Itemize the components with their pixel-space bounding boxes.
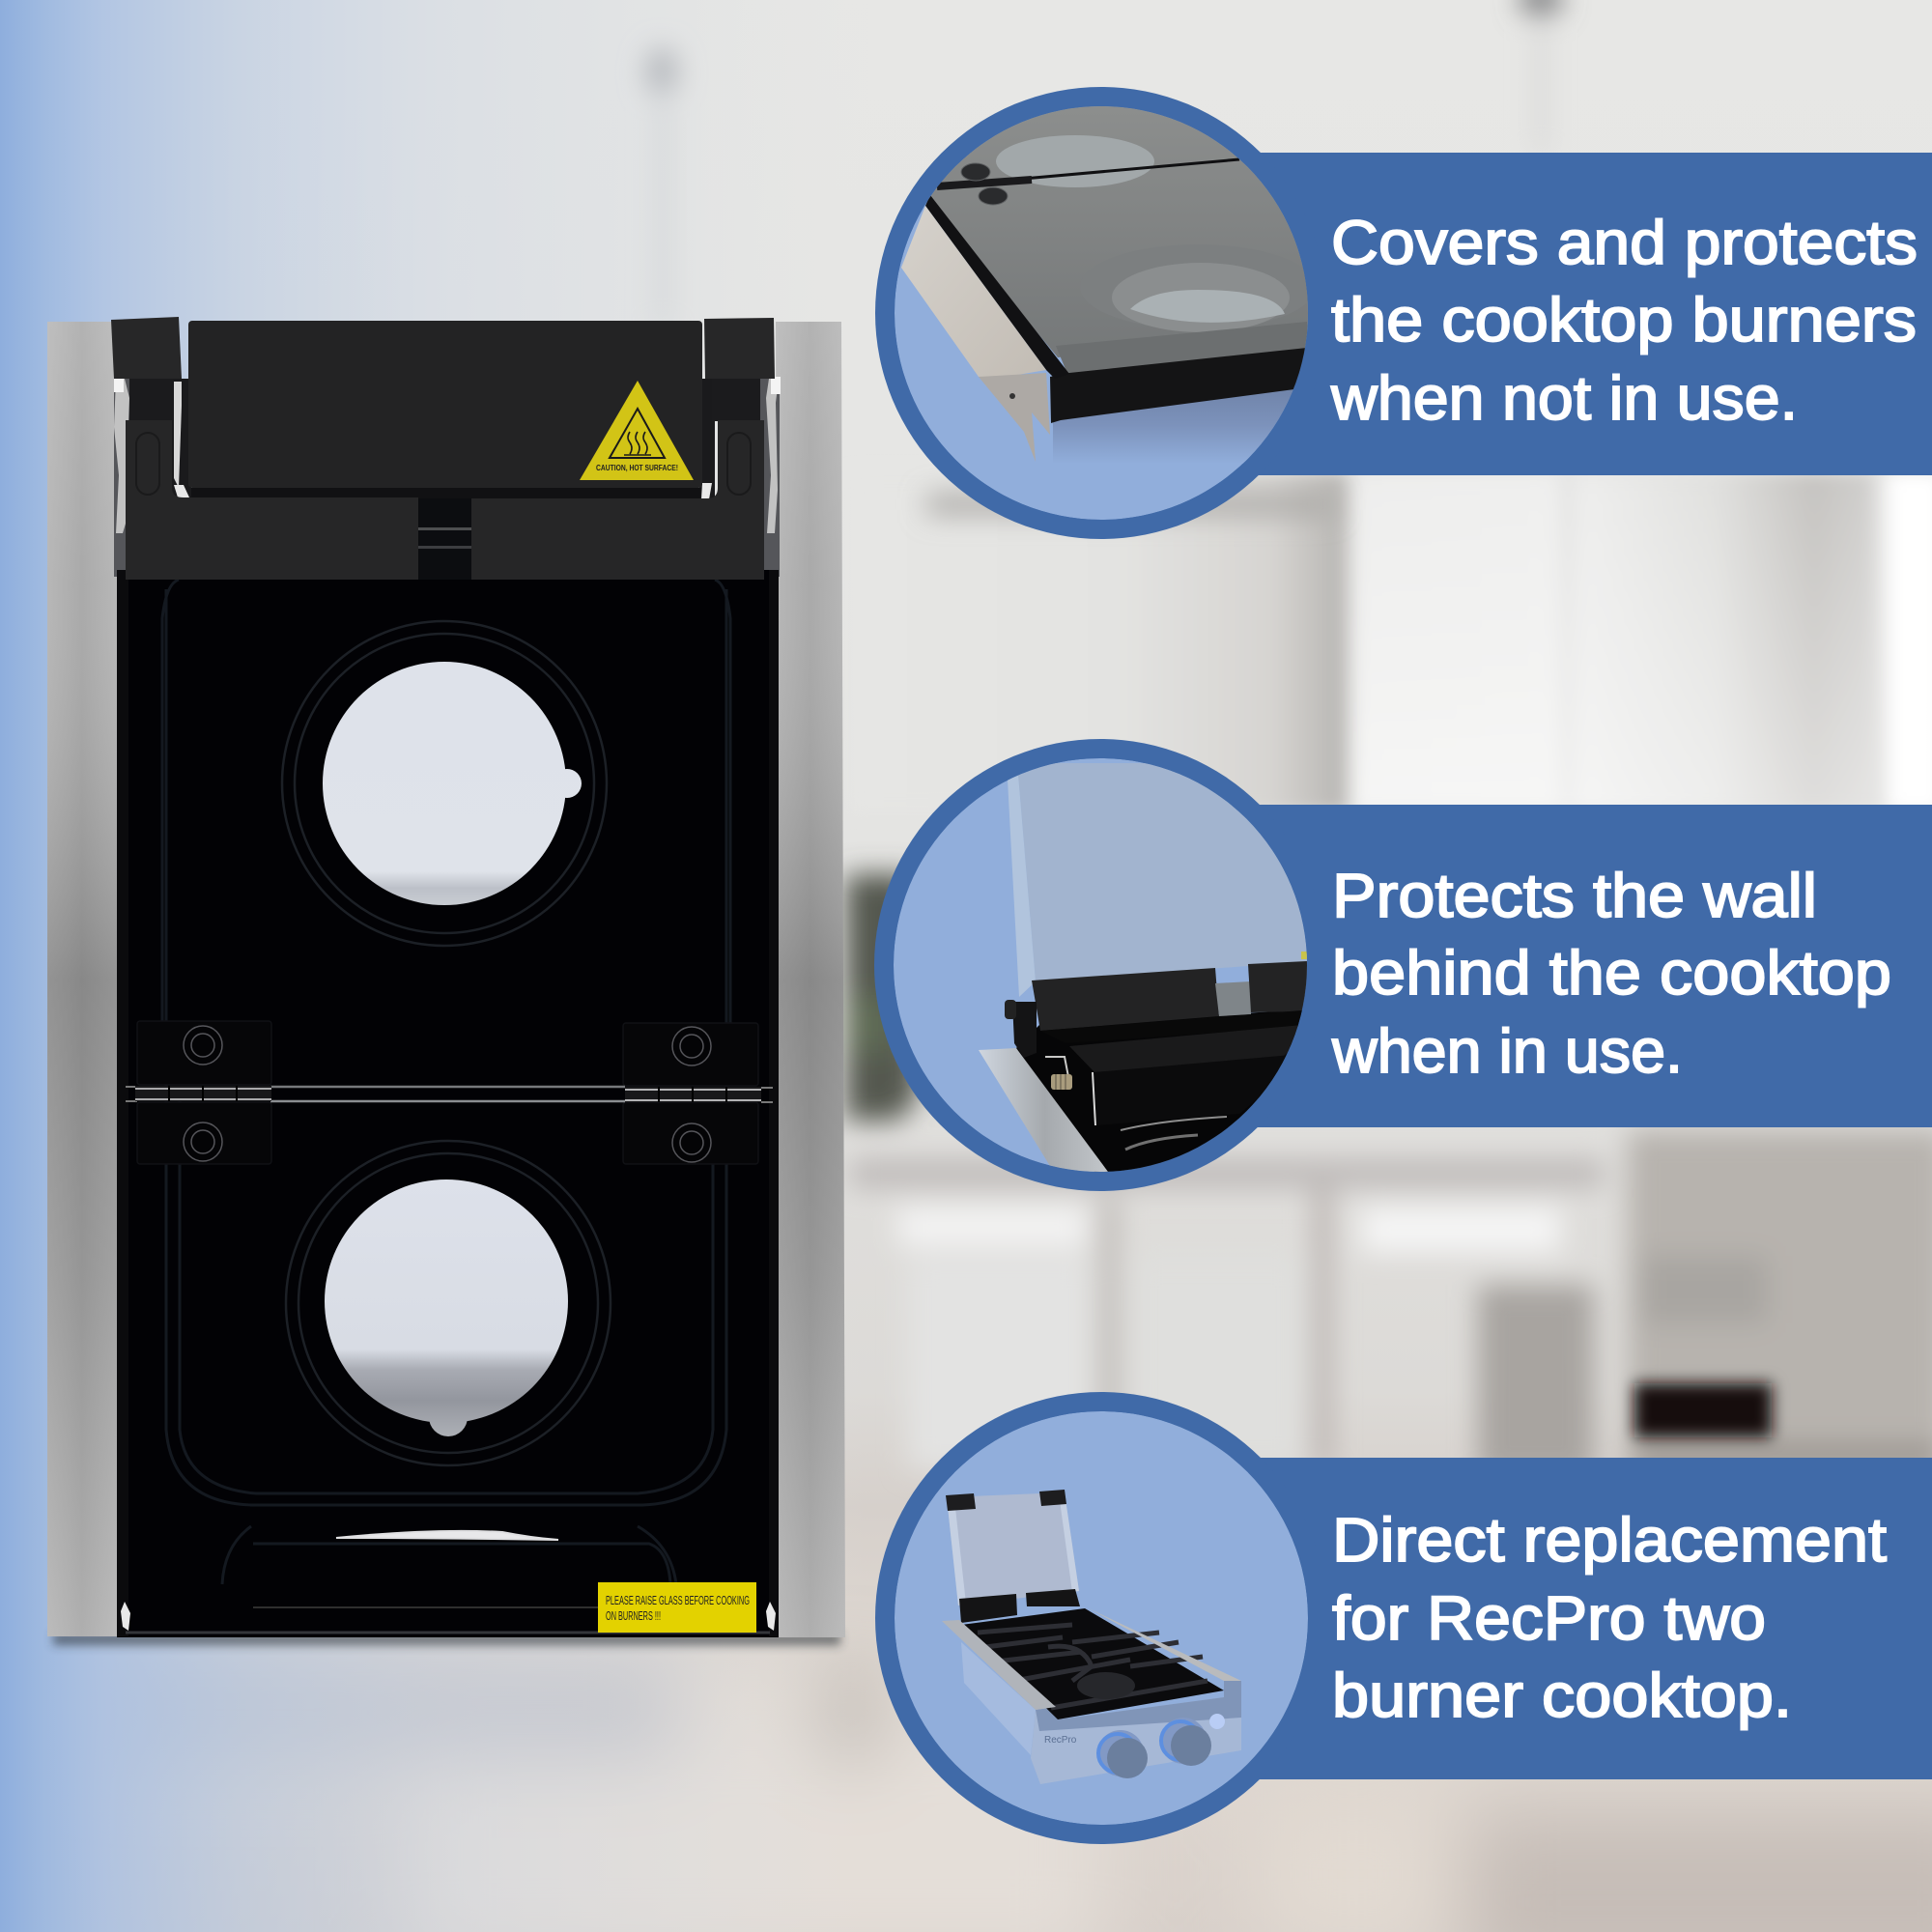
chrome hinge slivers	[114, 377, 781, 533]
bottom burner opening	[286, 1141, 611, 1465]
product: glass burner cover	[47, 317, 845, 1637]
black top flap	[188, 321, 702, 498]
black glass panel	[117, 570, 779, 1637]
caption 3: Direct replacement	[1332, 1505, 1887, 1575]
center gap behind hinges	[418, 488, 471, 580]
inner dish outlines	[162, 580, 730, 1584]
right stainless rail	[776, 322, 845, 1637]
chrome corner glints	[121, 1602, 776, 1631]
circle 3 photo: two burner cooktop: RecPro	[1044, 1735, 1077, 1746]
black appliance base	[1634, 1383, 1772, 1437]
right hinge block	[704, 318, 775, 379]
ribbon 3	[1101, 1458, 1932, 1779]
left hinge barrel	[135, 1086, 271, 1101]
caption 2: behind the cooktop	[1332, 938, 1891, 1008]
screws	[184, 1026, 711, 1162]
product shadow under cover	[53, 1633, 840, 1645]
cabinets	[850, 1159, 1604, 1188]
side and front faces	[961, 1642, 1036, 1755]
circle 2 ring	[874, 739, 1326, 1191]
caution triangle sticker: CAUTION, HOT SURFACE!	[596, 464, 678, 472]
caption 3: for RecPro two	[1332, 1583, 1766, 1653]
caption 3	[1332, 1505, 1887, 1730]
left L bracket	[126, 420, 418, 580]
caption 1: when not in use.	[1330, 363, 1798, 433]
right hinge barrel	[625, 1087, 761, 1102]
ribbon 2	[1101, 805, 1932, 1127]
circle 2 photo: raised glass cover	[894, 758, 1314, 1198]
right L bracket	[471, 420, 764, 580]
caption 1: Covers and protects	[1331, 208, 1918, 277]
circle 1 photo: closed glass cover	[895, 97, 1316, 520]
floor tones	[406, 1710, 1101, 1932]
feature 3: direct replacement	[875, 1392, 1932, 1844]
caption 1	[1330, 208, 1918, 433]
cooktop top	[961, 1608, 1224, 1719]
yellow instruction label: PLEASE RAISE GLASS BEFORE COOKING	[606, 1594, 750, 1607]
yellow instruction label: ON BURNERS !!!	[606, 1609, 661, 1623]
left hinge block	[111, 317, 182, 379]
left stainless rail	[47, 322, 117, 1636]
caption 2	[1331, 861, 1891, 1086]
reflection highlight	[336, 1531, 558, 1540]
top hinge necks	[129, 379, 760, 421]
knobs	[1097, 1718, 1211, 1778]
raised glass lid	[955, 1493, 1072, 1605]
shadow behind circle 1	[927, 495, 1333, 514]
window panes	[850, 473, 1932, 811]
top burner opening	[282, 621, 607, 946]
circle 3 ring	[875, 1392, 1327, 1844]
yellow instruction label	[598, 1582, 756, 1633]
steel side rails	[942, 1620, 1056, 1710]
pendant lights	[646, 47, 677, 98]
feature 1: covers and protects burners	[875, 87, 1932, 539]
caption 2: when in use.	[1331, 1016, 1683, 1086]
hinge plates and screws	[126, 1021, 773, 1164]
circle 3 photo: two burner cooktop	[895, 1411, 1308, 1825]
circle 1 ring	[875, 87, 1327, 539]
caution triangle sticker	[580, 381, 694, 480]
caption 2: Protects the wall	[1332, 861, 1817, 930]
hinge backing behind brackets	[114, 379, 780, 577]
dark greenery behind	[845, 874, 918, 1121]
caption 3: burner cooktop.	[1332, 1661, 1792, 1730]
feature 2: protects the wall	[874, 739, 1932, 1198]
caption 1: the cooktop burners	[1331, 285, 1917, 355]
ribbon 1	[1101, 153, 1932, 475]
